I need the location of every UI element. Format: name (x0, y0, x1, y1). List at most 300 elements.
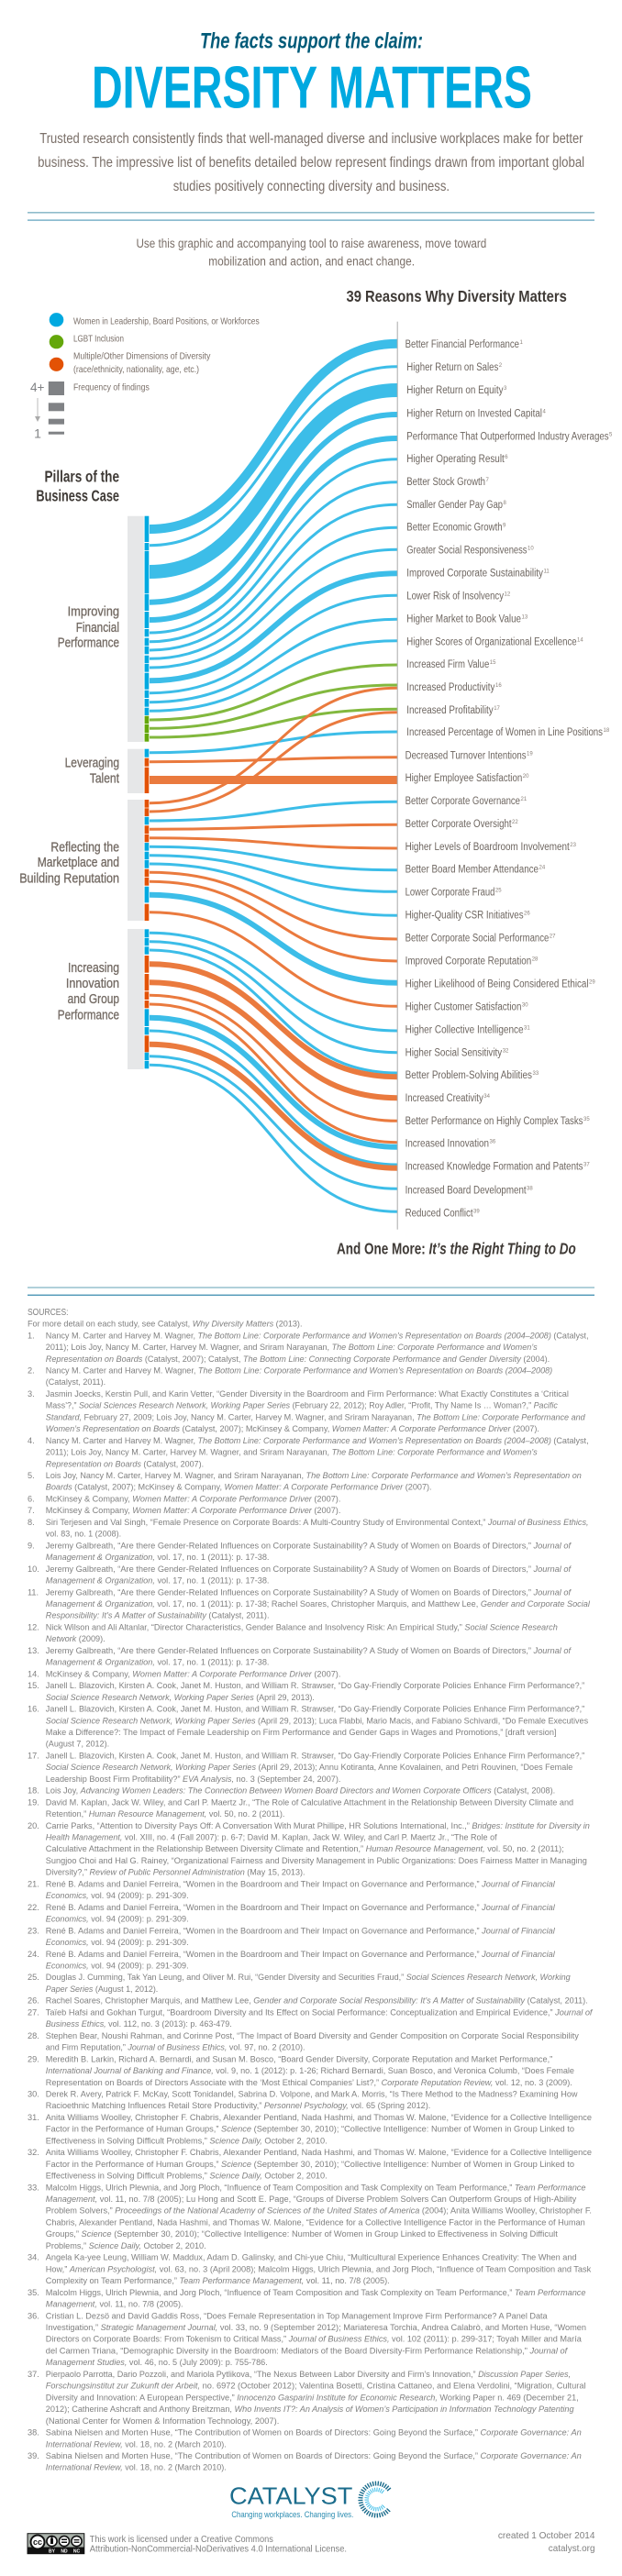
pillar label: reflecting the marketplace: Building Reputation (19, 871, 119, 886)
source 15: Social Science Research Network, Working Paper Series (April 29, 2013). (46, 1693, 315, 1702)
source 12: Nick Wilson and Ali Altanlar, “Director Characteristics, Gender Balance and Insolvency Risk: An Empirical Study,” Social Science Research (46, 1623, 558, 1632)
source 3 (28, 1389, 586, 1433)
source 29 (28, 2054, 574, 2087)
source 24: René B. Adams and Daniel Ferreira, “Women in the Boardroom and Their Impact on Governance and Performance,” Journal of Financial (46, 1950, 556, 1959)
source 21: 21. (28, 1879, 39, 1888)
reason 27: 27 (550, 934, 556, 939)
legend: other dimensions (50, 351, 211, 375)
source 6: 6. (28, 1495, 35, 1504)
reason 6: Higher Operating Result (406, 454, 505, 465)
reason 8: 8 (503, 501, 506, 506)
reason 19: 19 (527, 751, 533, 757)
source 27: 27. (28, 2007, 39, 2017)
reason 13: 13 (521, 615, 528, 621)
reason 2: Higher Return on Sales (406, 362, 499, 373)
source 37 (28, 2370, 585, 2426)
source 12 (28, 1623, 558, 1643)
pillar label: improving financial performance: Performance (58, 636, 119, 651)
reason 3: 3 (504, 386, 507, 392)
source 17: Janell L. Blazovich, Kirsten A. Cook, Janet M. Huston, and William R. Strawser, “Do Gay-Friendly Corporate Policies Enhance Firm Performance?,” (46, 1751, 584, 1760)
pillar label: improving financial performance (58, 605, 119, 651)
reason 10: 10 (528, 547, 534, 552)
source 17 (28, 1751, 584, 1784)
reason 23: Higher Levels of Boardroom Involvement (405, 842, 570, 853)
call to action: mobilization and action, and enact change. (208, 255, 415, 268)
source 34: Angela Ka-yee Leung, William W. Maddux, Adam D. Galinsky, and Chi-yue Chiu, “Multicultural Experience Enhances Creativity: The When and (46, 2253, 577, 2262)
reason 12: Lower Risk of Insolvency (406, 591, 504, 602)
source 8: vol. 83, no. 1 (2008). (46, 1530, 121, 1539)
pillar label: leveraging talent: Talent (90, 771, 119, 786)
date and url: catalyst.org (549, 2543, 595, 2554)
reason 29: Higher Likelihood of Being Considered Ethical (405, 978, 589, 989)
license text: Attribution-NonCommercial-NoDerivatives 4.0 International License. (90, 2545, 347, 2555)
reason 34: Increased Creativity (405, 1093, 483, 1104)
reason 21: Better Corporate Governance (405, 796, 520, 807)
reason 33: Better Problem-Solving Abilities (405, 1070, 532, 1081)
source 34 (28, 2253, 592, 2285)
reason 4: 4 (543, 409, 547, 415)
pillar label: increasing innovation: and Group (68, 992, 119, 1007)
source 24: 24. (28, 1950, 39, 1959)
source 33 (28, 2183, 592, 2250)
reason 21: 21 (521, 797, 528, 802)
reason 1: 1 (519, 340, 523, 346)
source 10: 10. (28, 1564, 39, 1574)
pillar label: reflecting the marketplace: Reflecting the (50, 840, 119, 855)
reason 33: 33 (532, 1071, 539, 1077)
reason 22: 22 (512, 820, 518, 825)
source 21: René B. Adams and Daniel Ferreira, “Women in the Boardroom and Their Impact on Governance and Performance,” Journal of Financial (46, 1879, 556, 1888)
source 20: Calculative Attachment in the Relationship Between Diversity Climate and Retention,” Human Resource Management, vol. 50, no. 2 (2011); (46, 1844, 564, 1853)
source 33: 33. (28, 2183, 39, 2192)
source 16 (28, 1704, 588, 1749)
source 19 (28, 1797, 573, 1819)
reason 9: Better Economic Growth (406, 523, 503, 534)
source 19: Retention,” Human Resource Management, vol. 50, no. 2 (2011). (46, 1809, 284, 1819)
source 37: (National Center for Women & Information Technology, 2007). (46, 2416, 279, 2426)
source 28: 28. (28, 2031, 39, 2040)
source 5: Boards (Catalyst, 2007); McKinsey & Company, Women Matter: A Corporate Performance Driver (2007). (46, 1483, 432, 1492)
source 25: Paper Series (August 1, 2012). (46, 1985, 158, 1994)
legend: lgbt: LGBT Inclusion (73, 334, 124, 345)
source 27: Business Ethics, vol. 112, no. 3 (2013): p. 463-479. (46, 2019, 232, 2029)
source 32: Effectiveness in Solving Difficult Problems,” Science Daily, October 2, 2010. (46, 2172, 328, 2181)
source 11: Jeremy Galbreath, “Are there Gender-Related Influences on Corporate Sustainability? A Study of Women on Boards of Directors,” Journal of (46, 1587, 572, 1597)
reason 10: Greater Social Responsiveness (406, 546, 528, 557)
date and url (498, 2530, 595, 2554)
source 10: Jeremy Galbreath, “Are there Gender-Related Influences on Corporate Sustainability? A Study of Women on Boards of Directors,” Journal of (46, 1564, 572, 1574)
creative commons badge: NC (73, 2549, 80, 2555)
reason 6: 6 (505, 455, 508, 460)
reason 39: 39 (473, 1210, 480, 1215)
source 8: 8. (28, 1518, 35, 1527)
source 13: Jeremy Galbreath, “Are there Gender-Related Influences on Corporate Sustainability? A Study of Women on Boards of Directors,” Journal of (46, 1646, 572, 1655)
creative commons badge: ND (61, 2549, 68, 2555)
source 38: International Review, vol. 18, no. 2 (March 2010). (46, 2439, 227, 2449)
source 39: 39. (28, 2451, 39, 2460)
reason 13: Higher Market to Book Value (406, 614, 521, 625)
source 17: 17. (28, 1751, 39, 1760)
source 9 (28, 1541, 572, 1562)
source 33: Groups,” Science (September 30, 2010); “Collective Intelligence: Number of Women in Group Linked to Effectiveness in Solving Difficult (46, 2229, 558, 2239)
source 31: Effectiveness in Solving Difficult Problems,” Science Daily, October 2, 2010. (46, 2136, 328, 2145)
sources (28, 1308, 594, 2472)
source 30: Racioethnic Matching Influences Retail Store Productivity,” Personnel Psychology, vol. 65 (Spring 2012). (46, 2101, 430, 2110)
source 4: 4. (28, 1436, 35, 1445)
legend: women (50, 313, 260, 326)
source 5: Lois Joy, Nancy M. Carter, Harvey M. Wagner, and Sriram Narayanan, The Bottom Line: Corporate Performance and Women’s Representation on (46, 1471, 582, 1480)
source 26: Rachel Soares, Christopher Marquis, and Matthew Lee, Gender and Corporate Social Responsibility: It’s A Matter of Sustainability (Catalyst, 2011). (46, 1996, 588, 2006)
pillar label: increasing innovation: Increasing (68, 961, 119, 976)
source 34: How,” American Psychologist, vol. 63, no. 3 (April 2008); Malcolm Higgs, Ulrich Plewnia, and Jorg Ploch, “Influence of Team Composition and Task (46, 2264, 592, 2273)
source 19: 19. (28, 1797, 39, 1807)
sources heading: SOURCES: (28, 1308, 68, 1318)
source 36: del Carmen Triana, “Demographic Diversity in the Boardroom: Mediators of the Board Diversity-Firm Performance Relationship,” Journal of (46, 2346, 569, 2355)
reason 30: Higher Customer Satisfaction (405, 1001, 521, 1012)
heading: and one more: And One More: It’s the Right Thing to Do (337, 1239, 576, 1257)
source 23 (28, 1926, 556, 1947)
reason 19: Decreased Turnover Intentions (405, 750, 527, 761)
source 39 (28, 2451, 582, 2472)
reason 36: Increased Innovation (405, 1139, 489, 1150)
intro paragraph: studies positively connecting diversity and business. (173, 179, 450, 194)
source 13 (28, 1646, 572, 1667)
reason 28: Improved Corporate Reputation (405, 956, 531, 967)
reason 24: Better Board Member Attendance (405, 865, 539, 876)
reason 20: 20 (523, 774, 529, 779)
source 28 (28, 2031, 579, 2052)
source 32 (28, 2148, 592, 2181)
source 21: Economics, vol. 94 (2009): p. 291-309. (46, 1891, 189, 1900)
source 16: Make a Difference?: The Impact of Female Leadership on Firm Performance and Gender Gaps in Wages and Promotions,” [draft version] (46, 1728, 557, 1737)
source 22 (28, 1903, 556, 1924)
source 3: Women’s Representation on Boards (Catalyst, 2007); McKinsey & Company, Women Matter: A Corporate Performance Driver (2007). (46, 1424, 539, 1433)
reason 7: 7 (486, 478, 490, 483)
source 18: Lois Joy, Advancing Women Leaders: The Connection Between Women Board Directors and Women Corporate Officers (Catalyst, 2008). (46, 1786, 555, 1796)
source 31: Anita Williams Woolley, Christopher F. Chabris, Alexander Pentland, Nada Hashmi, and Thomas W. Malone, “Evidence for a Collective Intelligence (46, 2113, 592, 2122)
source 5: 5. (28, 1471, 35, 1480)
source 20: Carrie Parks, “Attention to Diversity Pays Off: A Conversation With Murat Phillipe, HR Solutions International, Inc.,” Bridges: Institute for Diversity in (46, 1821, 590, 1830)
reason 38: 38 (527, 1186, 533, 1191)
reason 37: Increased Knowledge Formation and Patents (405, 1162, 583, 1173)
source 16: (August 7, 2012). (46, 1740, 109, 1749)
pillar label: increasing innovation: Innovation (66, 977, 119, 991)
source 19: David M. Kaplan, Jack W. Wiley, and Carl P. Maertz Jr., “The Role of Calculative Attachment in the Relationship Between Diversity Climate and (46, 1797, 573, 1807)
source 16: Social Science Research Network, Working Paper Series (April 29, 2013); Luca Flabbi, Mario Macis, and Fabiano Schivardi, “Do Female Executives (46, 1716, 588, 1725)
reason 36: 36 (490, 1140, 496, 1145)
heading: pillars (36, 468, 119, 504)
source 4: 2011); Lois Joy, Nancy M. Carter, Harvey M. Wagner, and Sriram Narayanan, The Bottom Line: Corporate Performance and Women’s (46, 1448, 538, 1457)
source 22: 22. (28, 1903, 39, 1912)
logo wordmark: CATALYST (229, 2484, 353, 2510)
source 32: 32. (28, 2148, 39, 2157)
pillar label: reflecting the marketplace: Marketplace and (38, 856, 119, 870)
reason 26: 26 (524, 912, 530, 917)
reason 37: 37 (583, 1163, 590, 1168)
reason 27: Better Corporate Social Performance (405, 933, 549, 944)
source 15: Janell L. Blazovich, Kirsten A. Cook, Janet M. Huston, and William R. Strawser, “Do Gay-Friendly Corporate Policies Enhance Firm Performance?,” (46, 1681, 584, 1690)
source 36 (28, 2311, 586, 2367)
pillar label: improving financial performance: Improving (68, 605, 119, 620)
source 34: Complexity on Team Performance,” Team Performance Management, vol. 11, no. 7/8 (2005). (46, 2276, 390, 2285)
legend: frequency scale: 4+ (30, 380, 44, 394)
source 37: Forschungsinstitut zur Zukunft der Arbeit, no. 6972 (October 2012); Valentina Bosetti, Cristina Cattaneo, and Elena Verdolini, “Migration, Cultural (46, 2382, 586, 2391)
source 33: Management, vol. 11, no. 7/8 (2005); Lu Hong and Scott E. Page, “Groups of Diverse Problem Solvers Can Outperform Groups of High-Ability (46, 2195, 577, 2204)
reason 16: Increased Productivity (406, 682, 495, 693)
logo mark: radial C (358, 2482, 391, 2517)
pillar label: leveraging talent (65, 757, 119, 786)
source 13: 13. (28, 1646, 39, 1655)
source 36: Investigation,” Strategic Management Journal, vol. 33, no. 9 (September 2012); Mariateresa Torchia, Andrea Calabrò, and Morten Huse, “Women (46, 2323, 586, 2332)
source 36: Cristian L. Dezsö and David Gaddis Ross, “Does Female Representation in Top Management Improve Firm Performance? A Panel Data (46, 2311, 548, 2320)
reason 17: Increased Profitability (406, 705, 494, 716)
reason 9: 9 (503, 524, 506, 529)
reason 3: Higher Return on Equity (406, 385, 504, 396)
reason 28: 28 (532, 956, 539, 962)
creative commons badge (28, 2534, 84, 2555)
sources intro: For more detail on each study, see Catalyst, Why Diversity Matters (2013). (28, 1320, 303, 1329)
reason 35: Better Performance on Highly Complex Tasks (405, 1116, 583, 1127)
source 25: 25. (28, 1973, 39, 1982)
source 4 (28, 1436, 589, 1468)
source 18: 18. (28, 1786, 39, 1796)
source 20 (28, 1821, 590, 1877)
source 25 (28, 1973, 572, 1994)
source 11: Responsibility: It’s A Matter of Sustainability (Catalyst, 2011). (46, 1611, 269, 1620)
source 4: Representation on Boards (Catalyst, 2007). (46, 1459, 204, 1468)
source 2: 2. (28, 1366, 35, 1376)
date and url: created 1 October 2014 (498, 2530, 595, 2541)
source 3: Standard, February 27, 2009; Lois Joy, Nancy M. Carter, Harvey M. Wagner, and Sriram Narayanan, The Bottom Line: Corporate Performance and (46, 1412, 586, 1421)
source 6: McKinsey & Company, Women Matter: A Corporate Performance Driver (2007). (46, 1495, 340, 1504)
flow chart: links between pillars and reasons (150, 344, 397, 1211)
source 9: Management & Organization, vol. 17, no. 1 (2011): p. 17-38. (46, 1553, 269, 1562)
source 24 (28, 1950, 556, 1970)
reason 2: 2 (499, 363, 503, 369)
license text (90, 2535, 347, 2555)
intro paragraph (38, 131, 584, 194)
reason 32: 32 (503, 1048, 509, 1054)
reason 14: 14 (577, 637, 583, 643)
legend: frequency scale (30, 380, 150, 441)
legend: frequency scale: Frequency of findings (73, 382, 150, 393)
source 31: Factor in the Performance of Human Groups,” Science (September 30, 2010); “Collective Intelligence: Number of Women in Group Linked to (46, 2125, 574, 2134)
source 38 (28, 2428, 582, 2449)
pillar label: increasing innovation (58, 961, 119, 1023)
source 8 (28, 1518, 589, 1539)
source 27: Taïeb Hafsi and Gokhan Turgut, “Boardroom Diversity and Its Effect on Social Performance: Conceptualization and Empirical Evidence,” Journal of (46, 2007, 594, 2017)
reason 16: 16 (495, 683, 502, 689)
reason 31: 31 (524, 1025, 530, 1031)
source 22: Economics, vol. 94 (2009): p. 291-309. (46, 1915, 189, 1924)
source 20: Health Management, vol. XIII, no. 4 (Fall 2007): p. 6-7; David M. Kaplan, Jack W. Wiley, and Carl P. Maertz Jr., “The Role of (46, 1832, 497, 1841)
pillar label: leveraging talent: Leveraging (65, 757, 119, 771)
source 17: Leadership Boost Firm Profitability?” EVA Analysis, no. 3 (September 24, 2007). (46, 1774, 340, 1784)
source 4: Nancy M. Carter and Harvey M. Wagner, The Bottom Line: Corporate Performance and Women’s Representation on Boards (2004–2008) (Catalyst, (46, 1436, 589, 1445)
reason 11: Improved Corporate Sustainability (406, 569, 543, 580)
source 8: Siri Terjesen and Val Singh, “Female Presence on Corporate Boards: A Multi-Country Study of Environmental Context,” Journal of Business Ethics, (46, 1518, 589, 1527)
reason 17: 17 (494, 706, 501, 712)
source 1: 1. (28, 1331, 35, 1340)
legend: lgbt (50, 334, 124, 348)
source 38: 38. (28, 2428, 39, 2438)
source 36: Directors on Corporate Boards: From Tokenism to Critical Mass,” Journal of Business Ethics, vol. 102 (2011): p. 299-317; Toyah Miller and María (46, 2335, 583, 2344)
reason 20: Higher Employee Satisfaction (405, 773, 522, 784)
creative commons badge: BY (49, 2549, 56, 2555)
source 30: Derek R. Avery, Patrick F. McKay, Scott Tonidandel, Sabrina D. Volpone, and Mark A. Morris, “Is There Method to the Madness? Examining How (46, 2089, 578, 2098)
source 35: 35. (28, 2288, 39, 2297)
source 37: 2012); Catherine Ashcraft and Anthony Breitzman, Who Invents IT?: An Analysis of Women’s Participation in Information Technology Patenting (46, 2405, 574, 2414)
reason 7: Better Stock Growth (406, 477, 485, 488)
source 33: Problem Solvers,” Proceedings of the National Academy of Sciences of the United States of America (2004); Anita Williams Woolley, Christopher F. (46, 2206, 592, 2216)
source 38: Sabina Nielsen and Morten Huse, “The Contribution of Women on Boards of Directors: Going Beyond the Surface,” Corporate Governance: An (46, 2428, 582, 2438)
source 15: 15. (28, 1681, 39, 1690)
source 34: 34. (28, 2253, 39, 2262)
call to action (136, 237, 486, 268)
reason 11: 11 (543, 569, 550, 575)
reason 14: Higher Scores of Organizational Excellence (406, 636, 577, 647)
source 23: Economics, vol. 94 (2009): p. 291-309. (46, 1938, 189, 1947)
source 13: Management & Organization, vol. 17, no. 1 (2011): p. 17-38. (46, 1658, 269, 1667)
source 5 (28, 1471, 582, 1492)
reason 24: 24 (539, 866, 546, 871)
reason 32: Higher Social Sensitivity (405, 1047, 502, 1058)
source 2: Nancy M. Carter and Harvey M. Wagner, The Bottom Line: Corporate Performance and Women’s Representation on Boards (2004–2008) (46, 1366, 552, 1376)
source 30 (28, 2089, 578, 2110)
source 1 (28, 1331, 589, 1364)
source 30: 30. (28, 2089, 39, 2098)
pillar label: improving financial performance: Financial (76, 621, 119, 636)
source 36: Management Studies, vol. 46, no. 5 (July 2009): p. 755-786. (46, 2358, 268, 2367)
source 23: René B. Adams and Daniel Ferreira, “Women in the Boardroom and Their Impact on Governance and Performance,” Journal of Financial (46, 1926, 556, 1935)
reason 23: 23 (570, 843, 577, 848)
source 10: Management & Organization, vol. 17, no. 1 (2011): p. 17-38. (46, 1575, 269, 1585)
source 35: Malcolm Higgs, Ulrich Plewnia, and Jorg Ploch, “Influence of Team Composition and Task Complexity on Team Performance,” Team Performance (46, 2288, 586, 2297)
reason 29: 29 (589, 979, 595, 985)
pillar bars (128, 516, 149, 1069)
source 14: McKinsey & Company, Women Matter: A Corporate Performance Driver (2007). (46, 1669, 340, 1678)
reason 30: 30 (522, 1002, 528, 1008)
source 36: 36. (28, 2311, 39, 2320)
source 17: Social Science Research Network, Working Paper Series (April 29, 2013); Annu Kotiranta, Anne Kovalainen, and Petri Rouvinen, “Does Female (46, 1763, 572, 1772)
source 7: McKinsey & Company, Women Matter: A Corporate Performance Driver (2007). (46, 1506, 340, 1515)
source 23: 23. (28, 1926, 39, 1935)
subtitle: The facts support the claim: (200, 29, 423, 54)
pillar label: reflecting the marketplace (19, 840, 119, 886)
source 1: Representation on Boards (Catalyst, 2007); Catalyst, The Bottom Line: Connecting Corporate Performance and Gender Diversity (2004). (46, 1354, 550, 1364)
reason 15: 15 (490, 660, 496, 666)
source 11: 11. (28, 1587, 39, 1597)
source 20: Sungjoo Choi and Hal G. Rainey, “Organizational Fairness and Diversity Management in Public Organizations: Does Fairness Matter in Managing (46, 1856, 587, 1865)
source 9: Jeremy Galbreath, “Are there Gender-Related Influences on Corporate Sustainability? A Study of Women on Boards of Directors,” Journal of (46, 1541, 572, 1550)
source 28: Stephen Bear, Noushi Rahman, and Corinne Post, “The Impact of Board Diversity and Gender Composition on Corporate Social Responsibility (46, 2031, 579, 2040)
source 10 (28, 1564, 572, 1585)
reason 39: Reduced Conflict (405, 1209, 473, 1220)
source 29: Meredith B. Larkin, Richard A. Bernardi, and Susan M. Bosco, “Board Gender Diversity, Corporate Reputation and Market Performance,” (46, 2054, 552, 2063)
creative commons badge: cc (33, 2537, 42, 2547)
source 28: and Firm Reputation,” Journal of Business Ethics, vol. 97, no. 2 (2010). (46, 2043, 305, 2052)
pillar label: increasing innovation: Performance (58, 1008, 119, 1023)
source 29: Representation on Boards of Directors Associate with the ‘Most Ethical Companies’ List?,” Corporate Reputation Review, vol. 12, no. 3 (2009). (46, 2078, 572, 2087)
reason 15: Increased Firm Value (406, 659, 489, 670)
source 24: Economics, vol. 94 (2009): p. 291-309. (46, 1961, 189, 1970)
reason 4: Higher Return on Invested Capital (406, 408, 542, 419)
call to action: Use this graphic and accompanying tool to raise awareness, move toward (136, 237, 486, 250)
license text: This work is licensed under a Creative Commons (90, 2535, 273, 2545)
source 35 (28, 2288, 585, 2309)
legend: women: Women in Leadership, Board Positions, or Workforces (73, 315, 260, 326)
source 31 (28, 2113, 592, 2145)
legend: other dimensions: Multiple/Other Dimensions of Diversity (73, 351, 211, 362)
source 22: René B. Adams and Daniel Ferreira, “Women in the Boardroom and Their Impact on Governance and Performance,” Journal of Financial (46, 1903, 556, 1912)
legend: other dimensions: (race/ethnicity, nationality, age, etc.) (73, 364, 199, 375)
source 27 (28, 2007, 594, 2029)
source 32: Factor in the Performance of Human Groups,” Science (September 30, 2010); “Collective Intelligence: Number of Women in Group Linked to (46, 2160, 574, 2169)
source 1: 2011); Lois Joy, Nancy M. Carter, Harvey M. Wagner, and Sriram Narayanan, The Bottom Line: Corporate Performance and Women’s (46, 1343, 538, 1352)
reason 31: Higher Collective Intelligence (405, 1024, 524, 1035)
source 39: International Review, vol. 18, no. 2 (March 2010). (46, 2463, 227, 2472)
reason 18: 18 (604, 728, 610, 734)
source 3: Jasmin Joecks, Kerstin Pull, and Karin Vetter, “Gender Diversity in the Boardroom and Firm Performance: What Exactly Constitutes a ‘Critical (46, 1389, 569, 1399)
source 11 (28, 1587, 591, 1620)
logo tagline: Changing workplaces. Changing lives. (231, 2510, 353, 2520)
source 33: Malcolm Higgs, Ulrich Plewnia, and Jorg Ploch, “Influence of Team Composition and Task Complexity on Team Performance,” Team Performance (46, 2183, 586, 2192)
source 20: 20. (28, 1821, 39, 1830)
source 37: Diversity and Innovation: A European Perspective,” Innocenzo Gasparini Institute for Economic Research, Working Paper n. 469 (December 21, (46, 2393, 579, 2402)
reasons list (405, 339, 613, 1220)
source 37: Pierpaolo Parrotta, Dario Pozzoli, and Mariola Pytlikova, “The Nexus Between Labor Diversity and Firm’s Innovation,” Discussion Paper Series, (46, 2370, 571, 2379)
heading: pillars: Pillars of the (44, 468, 119, 486)
source 32: Anita Williams Woolley, Christopher F. Chabris, Alexander Pentland, Nada Hashmi, and Thomas W. Malone, “Evidence for a Collective Intelligence (46, 2148, 592, 2157)
source 37: 37. (28, 2370, 39, 2379)
source 12: 12. (28, 1623, 39, 1632)
heading: pillars: Business Case (36, 486, 119, 504)
source 16: Janell L. Blazovich, Kirsten A. Cook, Janet M. Huston, and William R. Strawser, “Do Gay-Friendly Corporate Policies Enhance Firm Performance?,” (46, 1704, 584, 1713)
source 29: 29. (28, 2054, 39, 2063)
heading: 39 reasons: 39 Reasons Why Diversity Matters (347, 287, 567, 305)
source 3: 3. (28, 1389, 35, 1399)
legend: frequency scale: 1 (34, 426, 41, 441)
source 25: Douglas J. Cumming, Tak Yan Leung, and Oliver M. Rui, “Gender Diversity and Securities Fraud,” Social Sciences Research Network, Working (46, 1973, 572, 1982)
source 35: Management, vol. 11, no. 7/8 (2005). (46, 2300, 183, 2309)
reason 22: Better Corporate Oversight (405, 819, 512, 830)
source 14: 14. (28, 1669, 39, 1678)
reason 1: Better Financial Performance (405, 339, 519, 350)
source 21 (28, 1879, 556, 1900)
source 3: Mass’?,” Social Sciences Research Network, Working Paper Series (February 22, 2012); Roy Adler, “Profit, Thy Name Is … Woman?,” Pacific (46, 1401, 558, 1410)
source 11: Management & Organization, vol. 17, no. 1 (2011): p. 17-38; Rachel Soares, Christopher Marquis, and Matthew Lee, Gender and Corporate Social (46, 1599, 591, 1609)
reason 5: 5 (609, 432, 613, 437)
source 12: Network (2009). (46, 1634, 106, 1643)
source 33: Problems,” Science Daily, October 2, 2010. (46, 2241, 206, 2250)
reason 8: Smaller Gender Pay Gap (406, 500, 503, 511)
reason 12: 12 (505, 591, 511, 597)
reason 35: 35 (583, 1117, 590, 1122)
reason 38: Increased Board Development (405, 1185, 527, 1196)
legend (30, 313, 260, 441)
source 26: 26. (28, 1996, 39, 2006)
source 39: Sabina Nielsen and Morten Huse, “The Contribution of Women on Boards of Directors: Going Beyond the Surface,” Corporate Governance: An (46, 2451, 582, 2460)
source 31: 31. (28, 2113, 39, 2122)
reason 25: Lower Corporate Fraud (405, 888, 494, 899)
reason 25: 25 (495, 889, 502, 894)
reason 26: Higher-Quality CSR Initiatives (405, 911, 524, 922)
source 33: Chabris, Alexander Pentland, Nada Hashmi, and Thomas W. Malone, “Evidence for a Collective Intelligence Factor in the Performance of Human (46, 2217, 585, 2227)
source 9: 9. (28, 1541, 35, 1550)
source 20: Diversity?,” Review of Public Personnel Administration (May 15, 2013). (46, 1868, 305, 1877)
source 7: 7. (28, 1506, 35, 1515)
source 15 (28, 1681, 584, 1702)
